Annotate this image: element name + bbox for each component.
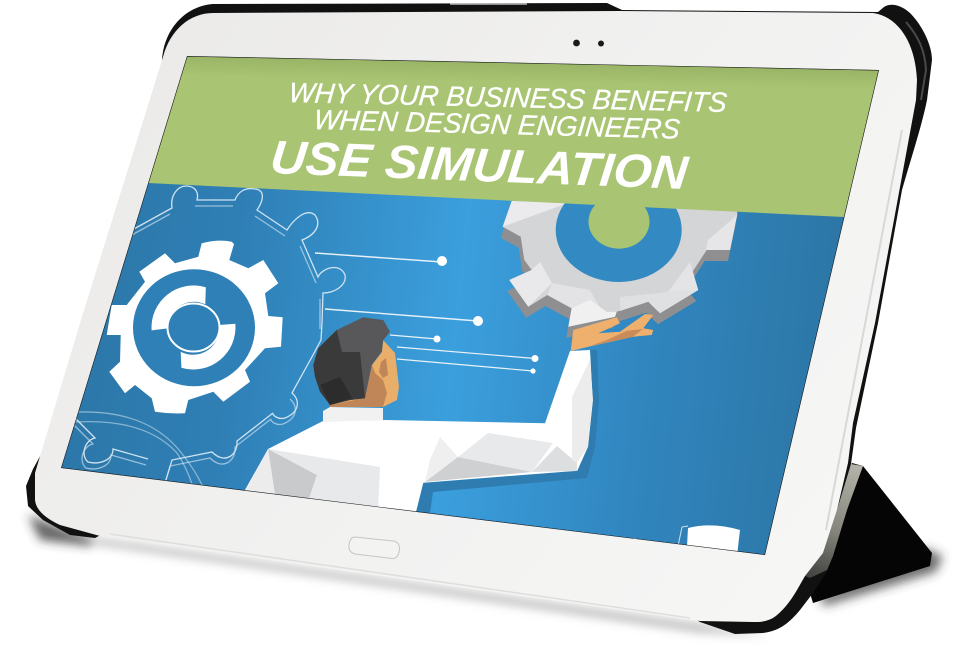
grey gear held up — [500, 201, 738, 338]
large white gear icon — [107, 241, 283, 413]
gear logo arcs — [151, 285, 206, 330]
green circle in gear — [588, 204, 650, 249]
blueprint gear outline — [73, 186, 345, 487]
gear light facets — [503, 201, 568, 227]
ear — [379, 358, 388, 378]
screen blue background — [61, 56, 879, 555]
gear face — [503, 201, 737, 327]
partial white shape at screen bottom — [634, 525, 740, 552]
top edge highlight — [450, 3, 527, 5]
neck and face — [330, 340, 399, 407]
home button — [349, 537, 400, 559]
folding stand — [800, 463, 932, 603]
title line 2: WHEN DESIGN ENGINEERS — [312, 104, 682, 145]
engineer figure — [240, 314, 653, 512]
white coat — [240, 350, 593, 512]
ground shadow — [28, 515, 943, 636]
hand shadow — [590, 329, 643, 346]
hair dark facets — [313, 330, 365, 405]
gear hole — [556, 203, 682, 282]
coat arm facets — [425, 437, 458, 482]
hinge strip — [805, 464, 863, 578]
connector lines with dots — [315, 253, 538, 374]
hair — [313, 317, 390, 405]
right bevel highlight — [826, 130, 902, 530]
title text — [268, 77, 728, 199]
collar — [323, 407, 383, 422]
camera and sensor dots — [573, 40, 604, 46]
title line 1: WHY YOUR BUSINESS BENEFITS — [287, 77, 728, 118]
screen — [61, 56, 879, 556]
corner gloss — [906, 22, 926, 100]
bottom bevel line — [110, 534, 690, 618]
gear shadow edge — [501, 212, 735, 338]
screen edge — [61, 56, 879, 555]
coat shoulder facets — [268, 449, 317, 502]
hand — [571, 314, 653, 351]
title line 3: USE SIMULATION — [268, 130, 691, 199]
green title band — [148, 56, 879, 217]
arm shadow — [416, 350, 599, 513]
